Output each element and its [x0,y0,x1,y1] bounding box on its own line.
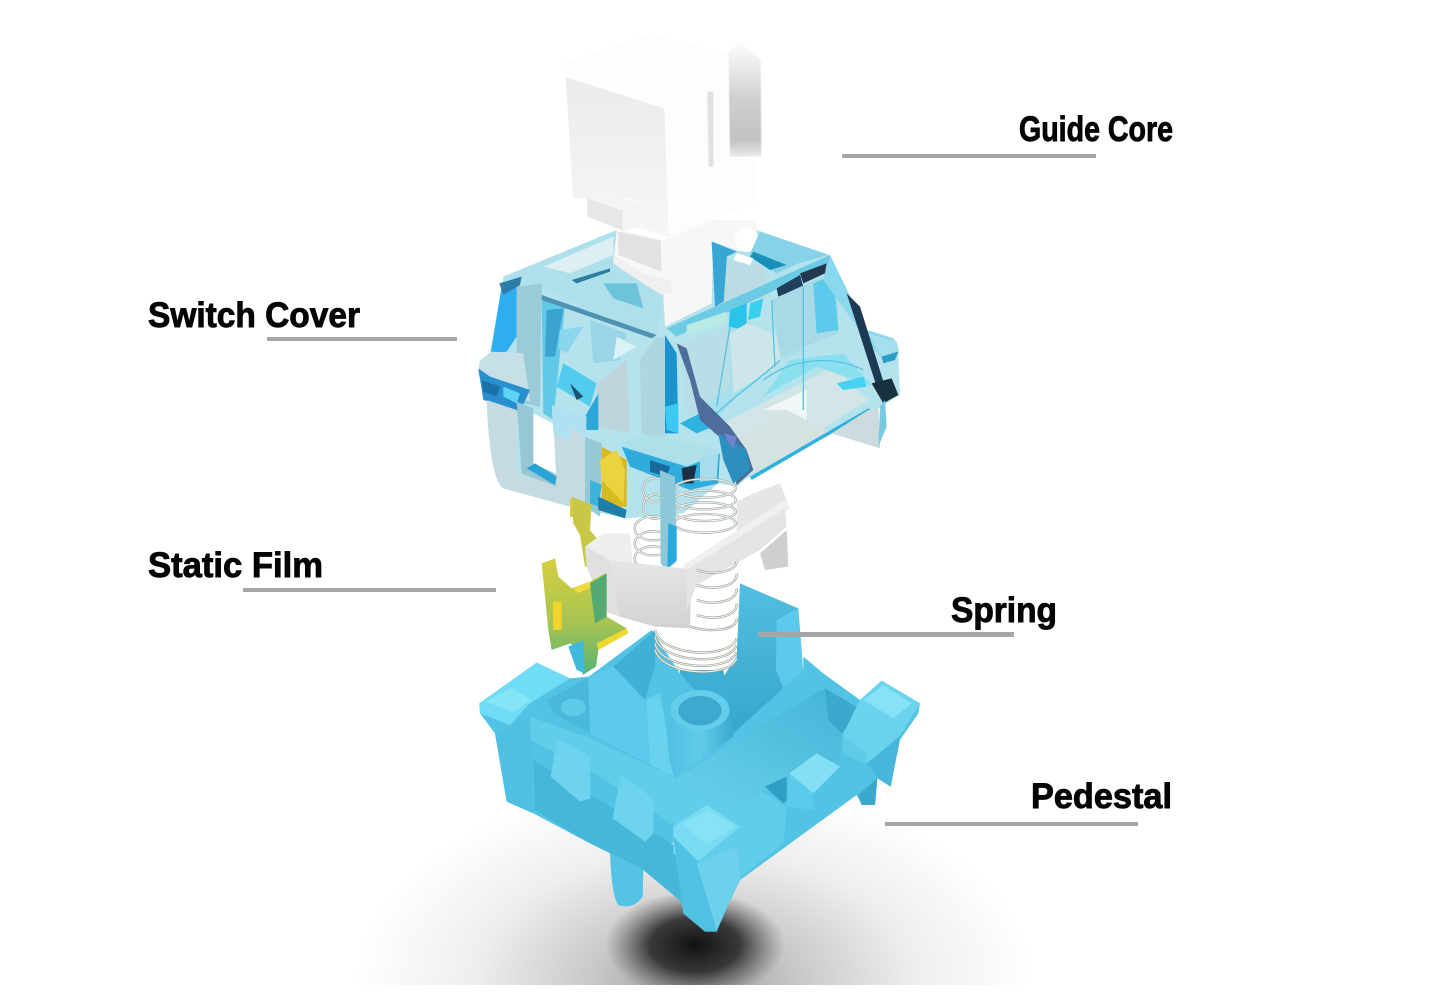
cover skirt [487,400,627,520]
film clip upper [572,497,607,570]
pedestal left corner tab [479,663,570,725]
pedestal guide tube [668,690,734,778]
spring upper coils [635,478,736,570]
pedestal body [479,630,920,932]
cover top plate [503,230,663,335]
leader: spring [758,632,1014,637]
leader: switch cover [267,337,457,341]
pedestal clip tabs [551,738,653,842]
cover left side [491,277,657,420]
floor shadow [411,830,978,985]
label: Guide Core: Guide Core [1019,110,1173,149]
pedestal left lower body [533,760,683,903]
pedestal back wall [680,583,803,733]
slider top strip [683,500,791,571]
guide core shadow slot [728,41,761,157]
spring lower [655,562,737,672]
pedestal front corner [673,805,740,932]
white slider back ridge [737,483,790,540]
cover right edge [847,293,898,447]
pedestal right corner tab [843,681,920,805]
cover front strut [677,343,753,485]
pedestal inner left wall [588,630,674,777]
pedestal [479,558,920,932]
label: Spring: Spring [951,591,1057,630]
label: Static Film: Static Film [148,546,323,585]
guide core groove [707,92,713,167]
guide core tab [587,192,637,231]
spring lower coils shadow [655,562,737,672]
guide core white block [566,33,757,238]
label: Switch Cover: Switch Cover [148,296,360,335]
slider platform [585,533,683,573]
pedestal trough [675,688,862,807]
pedestal left hole [561,699,586,716]
slider right leg [687,508,787,610]
leader: pedestal [885,822,1138,826]
cover right floor [680,353,880,480]
leader: static film [243,588,496,592]
cover stem passing through [613,220,759,327]
label: Pedestal: Pedestal [1031,777,1172,816]
pedestal cavity floor [547,678,590,733]
cover center facets [585,320,678,447]
leader lines [243,154,1138,826]
pedestal pin [610,853,643,906]
pedestal front rim [530,717,787,880]
guide core [566,33,761,238]
switch cover [478,220,900,520]
spring upper and slider [572,470,791,628]
guide core front face [566,77,669,237]
cover left flange [478,352,530,412]
slider left block [607,560,692,628]
spring lower coils highlight [655,562,737,672]
cover silhouette [478,230,900,518]
cover column [660,470,677,570]
cover right chamber [667,232,898,420]
cover front flange [620,433,720,490]
leader: guide core [842,154,1096,158]
cover glass edge lines [710,287,863,420]
pedestal right side tab [765,753,840,810]
static film [542,558,628,675]
